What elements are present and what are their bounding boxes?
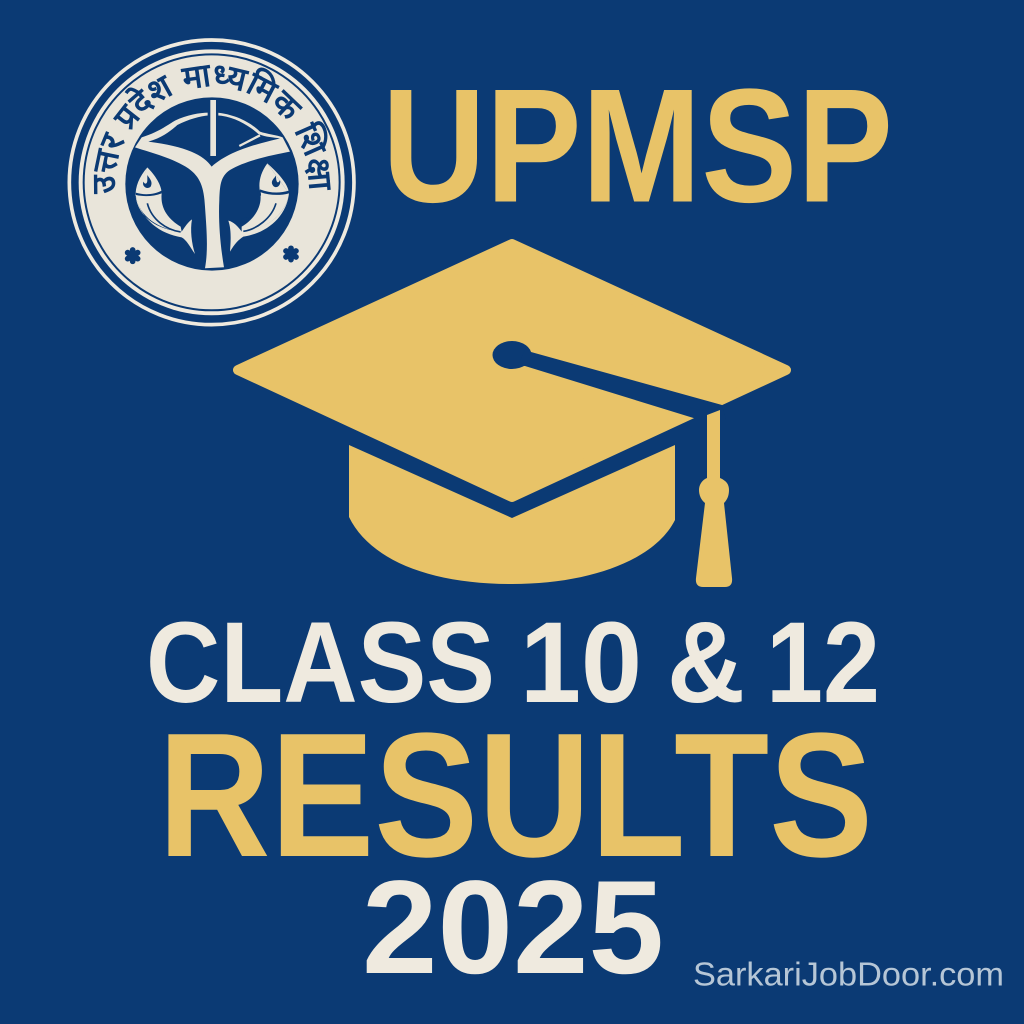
emblem: right star <box>286 248 296 260</box>
watermark: website: SarkariJobDoor.com <box>693 956 1004 992</box>
title: UPMSP: UPMSP <box>382 56 893 236</box>
year: 2025: 2025 <box>362 854 664 1002</box>
icon: graduation cap <box>238 244 786 587</box>
heading: class 10 & 12: 10 <box>520 599 642 727</box>
heading: class 10 & 12: CLASS <box>146 599 495 727</box>
cap board <box>238 244 786 497</box>
emblem: left fish <box>136 167 195 254</box>
heading: results: RESULTS <box>158 696 873 894</box>
logo: UPMSP circular seal <box>68 38 356 326</box>
emblem: right fish <box>228 163 289 252</box>
cap base <box>349 445 675 584</box>
cap button and band <box>492 341 726 420</box>
tassel <box>696 410 732 587</box>
seal text: उत्तर प्रदेश माध्यमिक शिक्षा <box>94 64 331 194</box>
heading: class 10 & 12 <box>146 599 880 727</box>
heading: class 10 & 12: & <box>667 599 745 727</box>
seal centre disc <box>125 97 299 271</box>
emblem: bow and arrow <box>135 100 290 268</box>
emblem: left star <box>128 250 138 261</box>
heading: class 10 & 12: 12 <box>766 599 880 727</box>
